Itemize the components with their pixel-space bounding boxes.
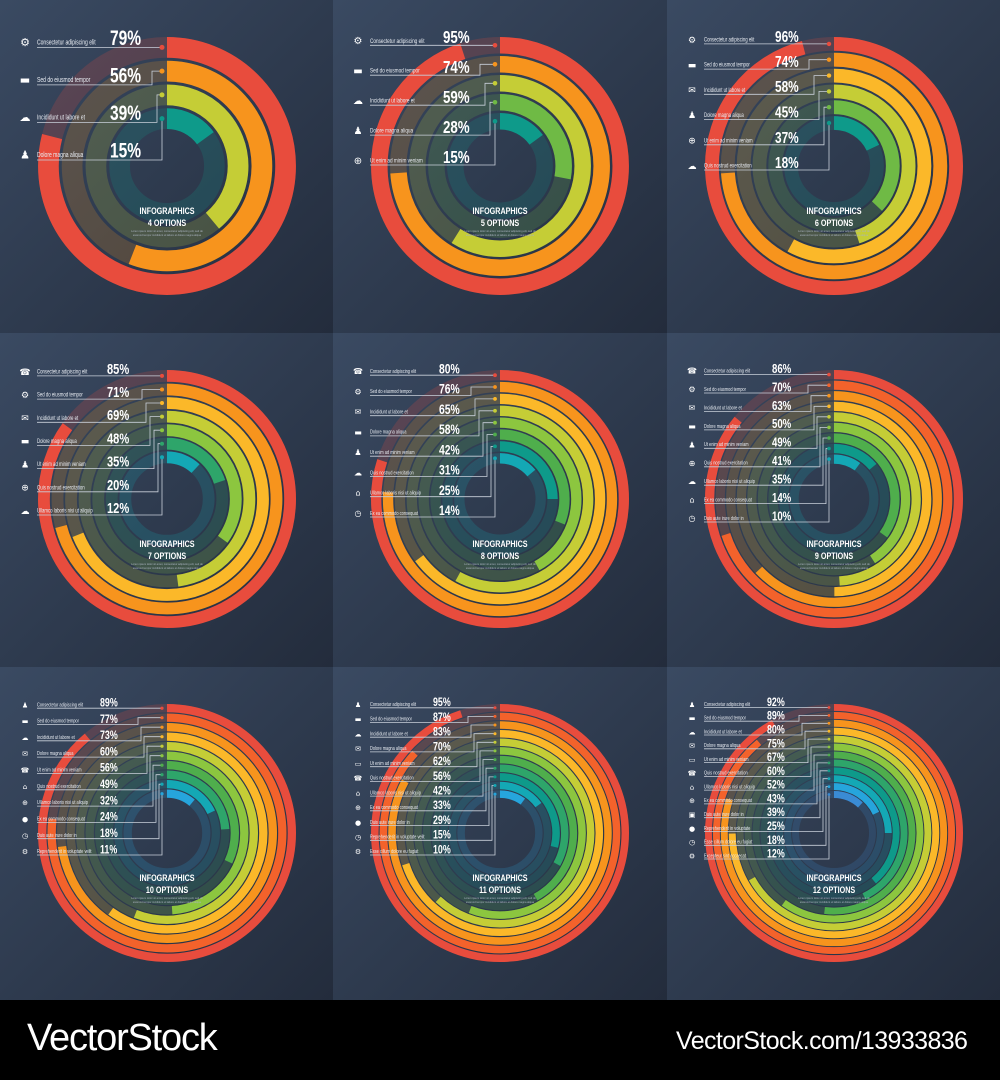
legend rows: [687, 363, 831, 524]
legend rows: 41%: [772, 455, 791, 468]
center title: INFOGRAPHICS: [807, 873, 862, 883]
center title: [798, 206, 870, 237]
legend rows: 89%: [100, 696, 118, 710]
legend rows: [688, 27, 831, 172]
legend rows: 73%: [100, 729, 118, 743]
legend rows: Reprehenderit in voluptate velit: [37, 849, 92, 855]
legend rows: ▬: [353, 66, 363, 77]
legend rows: ▬: [20, 74, 30, 86]
legend rows: 70%: [433, 740, 451, 754]
legend rows: ⊕: [689, 797, 695, 805]
legend rows: 76%: [439, 381, 460, 397]
legend rows: 60%: [767, 765, 785, 778]
legend rows: 15%: [443, 148, 470, 168]
legend rows: ⚙: [354, 388, 362, 396]
legend rows: Quis nostrud exercitation: [704, 770, 748, 777]
legend rows: ☁: [22, 734, 28, 742]
legend rows: 37%: [775, 128, 799, 146]
legend rows: Ullamco laboris nisi ut aliquip: [37, 800, 88, 806]
legend rows: Ut enim ad minim veniam: [704, 756, 749, 763]
legend rows: ☎: [353, 367, 363, 376]
legend rows: Ullamco laboris nisi ut aliquip: [704, 479, 755, 485]
legend rows: ♟: [21, 460, 29, 470]
legend rows: ◷: [689, 514, 696, 523]
legend rows: 85%: [107, 360, 129, 377]
legend rows: 83%: [433, 725, 451, 739]
legend rows: Quis nostrud exercitation: [704, 163, 752, 170]
legend rows: 31%: [439, 462, 460, 478]
chart: 4 rings: [48, 47, 286, 285]
legend rows: Incididunt ut labore et: [37, 114, 85, 122]
legend rows: 18%: [767, 834, 785, 847]
legend rows: Sed do eiusmod tempor: [370, 389, 412, 395]
center title: eiusmod tempor incididunt ut labore et dolore magna aliqua: [466, 233, 535, 237]
legend rows: Incididunt ut labore et: [370, 409, 408, 416]
legend rows: Sed do eiusmod tempor: [370, 716, 412, 723]
legend rows: ⌂: [23, 783, 27, 791]
legend rows: Duis aute irure dolor in: [704, 515, 744, 522]
center title: INFOGRAPHICS: [473, 206, 528, 216]
legend rows: Dolore magna aliqua: [704, 743, 741, 749]
legend rows: [21, 696, 164, 857]
legend rows: [20, 26, 164, 162]
chart: 8 rings: [376, 375, 624, 623]
center title: Lorem ipsum dolor sit amet, consectetur adipiscing elit, sed do: [464, 562, 536, 566]
legend rows: ♟: [355, 701, 361, 709]
legend rows: 35%: [772, 473, 791, 487]
center title: [464, 539, 536, 570]
legend rows: 48%: [107, 430, 129, 447]
chart: 5 rings: [379, 45, 621, 287]
footer logo text: VectorStock: [27, 1017, 217, 1059]
legend rows: ☎: [19, 368, 31, 378]
legend rows: Consectetur adipiscing elit: [37, 369, 88, 376]
legend rows: 45%: [775, 103, 799, 121]
legend rows: [353, 28, 497, 168]
legend rows: ⊕: [354, 156, 362, 167]
legend rows: 60%: [100, 745, 118, 759]
center title: eiusmod tempor incididunt ut labore et dolore magna aliqua: [133, 566, 202, 570]
center title: 8 OPTIONS: [481, 551, 520, 561]
panel: 4 options: [0, 0, 333, 333]
legend rows: Dolore magna aliqua: [370, 429, 407, 436]
legend rows: Quis nostrud exercitation: [37, 485, 85, 492]
legend rows: 25%: [767, 820, 785, 833]
legend rows: ▬: [355, 716, 361, 724]
legend rows: ◷: [22, 832, 29, 840]
legend rows: 86%: [772, 363, 791, 376]
legend rows: 12%: [107, 499, 129, 516]
legend rows: Ut enim ad minim veniam: [370, 449, 415, 456]
legend rows: 39%: [767, 806, 785, 820]
legend rows: Sed do eiusmod tempor: [370, 68, 420, 75]
legend rows: Incididunt ut labore et: [37, 734, 75, 741]
legend rows: Ex ea commodo consequat: [704, 497, 752, 504]
legend rows: Ut enim ad minim veniam: [37, 767, 82, 774]
legend rows: ⚙: [21, 391, 29, 401]
legend rows: ✉: [355, 745, 361, 753]
legend rows: ☁: [688, 728, 696, 736]
legend rows: 18%: [100, 827, 118, 840]
legend rows: Ex ea commodo consequat: [370, 804, 418, 811]
legend rows: 12%: [767, 847, 785, 861]
legend rows: Incididunt ut labore et: [370, 98, 415, 105]
legend rows: ⊕: [688, 136, 696, 146]
legend rows: Consectetur adipiscing elit: [37, 39, 96, 47]
legend rows: 43%: [767, 792, 785, 806]
legend rows: 52%: [767, 778, 785, 792]
chart: 9 rings: [710, 375, 958, 623]
legend rows: ⌂: [689, 496, 695, 505]
panel: 11 options: [333, 667, 667, 1000]
legend rows: ☁: [354, 730, 362, 738]
legend rows: Esse cillum dolore eu fugiat: [704, 839, 753, 846]
center title: INFOGRAPHICS: [807, 539, 862, 549]
legend rows: ●: [689, 825, 695, 833]
legend rows: Dolore magna aliqua: [370, 128, 414, 135]
legend rows: [354, 696, 496, 857]
center title: 5 OPTIONS: [481, 218, 520, 228]
legend rows: Ullamco laboris nisi ut aliquip: [370, 790, 421, 797]
legend rows: Consectetur adipiscing elit: [370, 701, 417, 708]
legend rows: ▬: [688, 61, 696, 71]
legend rows: ☎: [354, 775, 363, 783]
legend rows: ⚙: [354, 36, 362, 47]
legend rows: 63%: [772, 400, 791, 413]
center title: Lorem ipsum dolor sit amet, consectetur adipiscing elit, sed do: [131, 229, 203, 233]
legend rows: ☎: [21, 766, 30, 774]
legend rows: ●: [22, 816, 28, 824]
legend rows: ☎: [688, 770, 697, 778]
legend rows: ✉: [22, 750, 28, 758]
legend rows: ▬: [354, 428, 362, 437]
legend rows: Ullamco laboris nisi ut aliquip: [370, 490, 421, 497]
legend rows: ⚙: [22, 848, 28, 856]
legend rows: Duis aute irure dolor in: [370, 819, 410, 826]
legend rows: Quis nostrud exercitation: [370, 470, 414, 477]
legend rows: Duis aute irure dolor in: [37, 832, 77, 839]
center title: [131, 539, 203, 570]
chart: 6 rings: [712, 44, 956, 288]
legend rows: 25%: [439, 482, 460, 498]
legend rows: ⊕: [689, 459, 695, 468]
legend rows: ☁: [20, 507, 30, 517]
legend rows: Consectetur adipiscing elit: [704, 701, 751, 708]
legend rows: 15%: [110, 138, 141, 162]
legend rows: 39%: [110, 101, 141, 125]
center title: Lorem ipsum dolor sit amet, consectetur adipiscing elit, sed do: [798, 562, 870, 566]
legend rows: 35%: [107, 453, 129, 470]
legend rows: ▬: [21, 437, 29, 447]
legend rows: ♟: [688, 440, 696, 449]
legend rows: 92%: [767, 696, 785, 709]
legend rows: Consectetur adipiscing elit: [37, 702, 84, 709]
legend rows: Ullamco laboris nisi ut aliquip: [704, 784, 755, 791]
chart: 7 rings: [44, 376, 290, 622]
center title: Lorem ipsum dolor sit amet, consectetur adipiscing elit, sed do: [464, 896, 536, 900]
legend rows: Sed do eiusmod tempor: [704, 386, 746, 393]
legend rows: Dolore magna aliqua: [704, 113, 744, 119]
legend rows: 18%: [775, 153, 799, 171]
legend rows: 14%: [439, 502, 460, 518]
legend rows: 14%: [772, 492, 791, 505]
legend rows: 15%: [433, 828, 451, 842]
legend rows: 42%: [439, 442, 460, 458]
panel: 7 options: [0, 333, 333, 667]
legend rows: 59%: [443, 88, 470, 108]
legend rows: ▬: [689, 714, 695, 722]
legend rows: ⚙: [688, 385, 696, 394]
legend rows: 29%: [433, 814, 451, 827]
chart: 12 rings: [708, 707, 960, 959]
legend rows: 24%: [100, 810, 118, 824]
legend rows: Sed do eiusmod tempor: [704, 62, 750, 69]
legend rows: 71%: [107, 383, 129, 400]
legend rows: Incididunt ut labore et: [704, 405, 742, 412]
center title: Lorem ipsum dolor sit amet, consectetur adipiscing elit, sed do: [798, 229, 870, 233]
center title: INFOGRAPHICS: [140, 539, 195, 549]
legend rows: 69%: [107, 406, 129, 423]
legend rows: Incididunt ut labore et: [37, 415, 79, 422]
legend rows: ♟: [354, 126, 362, 137]
legend rows: ✉: [689, 404, 695, 412]
legend rows: [688, 696, 830, 861]
legend rows: 70%: [772, 381, 791, 395]
center title: eiusmod tempor incididunt ut labore et dolore magna aliqua: [466, 566, 535, 570]
legend rows: ⚙: [689, 852, 695, 860]
legend rows: 80%: [767, 723, 785, 737]
center title: Lorem ipsum dolor sit amet, consectetur adipiscing elit, sed do: [131, 896, 203, 900]
legend rows: 67%: [767, 751, 785, 765]
legend rows: 89%: [767, 709, 785, 723]
legend rows: 74%: [443, 58, 470, 78]
legend rows: ⊕: [355, 804, 361, 812]
legend rows: Incididunt ut labore et: [704, 87, 746, 94]
legend rows: Incididunt ut labore et: [370, 731, 408, 738]
center title: [464, 873, 536, 904]
center title: eiusmod tempor incididunt ut labore et dolore magna aliqua: [466, 900, 535, 904]
legend rows: Ut enim ad minim veniam: [370, 760, 415, 767]
center title: 11 OPTIONS: [479, 885, 522, 895]
legend rows: ♟: [22, 701, 28, 709]
legend rows: 50%: [772, 418, 791, 432]
legend rows: Sed do eiusmod tempor: [37, 392, 83, 399]
legend rows: Dolore magna aliqua: [37, 438, 77, 445]
legend rows: Ut enim ad minim veniam: [704, 138, 753, 145]
center title: Lorem ipsum dolor sit amet, consectetur adipiscing elit, sed do: [798, 896, 870, 900]
legend rows: ⌂: [355, 488, 361, 498]
legend rows: 95%: [443, 28, 470, 48]
legend rows: ●: [355, 819, 361, 827]
panel: 9 options: [667, 333, 1000, 667]
legend rows: 80%: [439, 361, 460, 377]
legend rows: ☎: [687, 366, 697, 376]
legend rows: 10%: [433, 843, 451, 857]
legend rows: ⚙: [355, 848, 361, 856]
legend rows: 56%: [110, 63, 141, 87]
legend rows: 49%: [100, 778, 118, 792]
legend rows: Dolore magna aliqua: [370, 746, 407, 752]
legend rows: 33%: [433, 799, 451, 813]
legend rows: 10%: [772, 510, 791, 524]
legend rows: Ex ea commodo consequat: [370, 510, 418, 517]
legend rows: ⚙: [688, 36, 696, 46]
legend rows: Quis nostrud exercitation: [370, 775, 414, 782]
legend rows: Sed do eiusmod tempor: [37, 76, 90, 84]
legend rows: Consectetur adipiscing elit: [370, 368, 417, 375]
legend rows: Dolore magna aliqua: [37, 751, 74, 757]
legend rows: ☁: [20, 111, 30, 124]
legend rows: Reprehenderit in voluptate: [704, 825, 751, 832]
legend rows: 32%: [100, 794, 118, 808]
legend rows: ◷: [355, 834, 362, 842]
legend rows: 58%: [775, 77, 799, 95]
center title: eiusmod tempor incididunt ut labore et dolore magna aliqua: [133, 233, 202, 237]
legend rows: ☁: [688, 477, 696, 486]
legend rows: ☁: [353, 96, 363, 107]
chart: 11 rings: [375, 708, 625, 958]
legend rows: 56%: [433, 770, 451, 783]
center title: 4 OPTIONS: [148, 218, 187, 228]
legend rows: Duis aute irure dolor in: [704, 811, 744, 818]
center title: INFOGRAPHICS: [473, 539, 528, 549]
legend rows: ⊕: [22, 799, 28, 807]
center title: [798, 873, 870, 904]
legend rows: Incididunt ut labore et: [704, 729, 742, 736]
legend rows: ⚙: [20, 36, 30, 49]
legend rows: Dolore magna aliqua: [704, 423, 741, 430]
legend rows: Consectetur adipiscing elit: [370, 38, 425, 45]
legend rows: 49%: [772, 436, 791, 450]
legend rows: Consectetur adipiscing elit: [704, 37, 755, 44]
legend rows: Ut enim ad minim veniam: [370, 158, 423, 165]
center title: 10 OPTIONS: [146, 885, 189, 895]
center title: INFOGRAPHICS: [807, 206, 862, 216]
legend rows: ◷: [355, 509, 362, 518]
center title: INFOGRAPHICS: [140, 206, 195, 216]
legend rows: 58%: [439, 421, 460, 437]
legend rows: 77%: [100, 713, 118, 726]
footer watermark bar: [0, 1000, 1000, 1080]
center title: INFOGRAPHICS: [473, 873, 528, 883]
legend rows: ◷: [689, 839, 696, 847]
center title: 9 OPTIONS: [815, 551, 854, 561]
legend rows: ⌂: [690, 783, 694, 791]
legend rows: Quis nostrud exercitation: [37, 783, 81, 790]
legend rows: ⊕: [21, 484, 29, 494]
legend rows: ☁: [688, 162, 696, 172]
center title: 7 OPTIONS: [148, 551, 187, 561]
footer url text: VectorStock.com/13933836: [676, 1027, 967, 1055]
legend rows: 74%: [775, 52, 799, 70]
legend rows: 87%: [433, 711, 451, 724]
center title: [131, 873, 203, 904]
panel: 10 options: [0, 667, 333, 1000]
chart: 10 rings: [42, 708, 292, 958]
center title: 6 OPTIONS: [815, 218, 854, 228]
legend rows: Consectetur adipiscing elit: [704, 368, 751, 375]
legend rows: ⌂: [356, 789, 360, 797]
legend rows: [19, 360, 164, 517]
legend rows: Excepteur sint occaecat: [704, 853, 747, 860]
legend rows: Ut enim ad minim veniam: [704, 442, 749, 448]
center title: eiusmod tempor incididunt ut labore et dolore magna aliqua: [800, 900, 869, 904]
center title: [131, 206, 203, 237]
legend rows: Ex ea commodo consequat: [704, 798, 752, 804]
panel: 8 options: [333, 333, 667, 667]
legend rows: Sed do eiusmod tempor: [704, 715, 746, 722]
legend rows: ✉: [21, 414, 29, 424]
legend rows: 79%: [110, 26, 141, 50]
legend rows: ▭: [355, 760, 361, 768]
legend rows: 95%: [433, 696, 451, 710]
legend rows: ▬: [688, 422, 696, 431]
legend rows: ▭: [689, 756, 695, 764]
center title: 12 OPTIONS: [813, 885, 856, 895]
center title: INFOGRAPHICS: [140, 873, 195, 883]
panel: 12 options: [667, 667, 1000, 1000]
legend rows: Quis nostrud exercitation: [704, 460, 748, 467]
legend rows: ✉: [355, 408, 361, 416]
legend rows: ♟: [688, 111, 696, 121]
center title: Lorem ipsum dolor sit amet, consectetur adipiscing elit, sed do: [131, 562, 203, 566]
legend rows: ♟: [689, 701, 695, 709]
legend rows: 65%: [439, 401, 460, 417]
legend rows: 28%: [443, 118, 470, 138]
legend rows: [353, 361, 497, 518]
center title: [798, 539, 870, 570]
center title: [464, 206, 536, 237]
legend rows: ♟: [20, 148, 30, 162]
legend rows: Sed do eiusmod tempor: [37, 718, 79, 725]
legend rows: 96%: [775, 27, 799, 45]
legend rows: Ullamco laboris nisi ut aliquip: [37, 508, 93, 515]
center title: eiusmod tempor incididunt ut labore et dolore magna aliqua: [800, 233, 869, 237]
legend rows: 62%: [433, 755, 451, 769]
legend rows: Ut enim ad minim veniam: [37, 462, 86, 468]
panel: 5 options: [333, 0, 667, 333]
center title: eiusmod tempor incididunt ut labore et dolore magna aliqua: [800, 566, 869, 570]
legend rows: ▬: [22, 718, 28, 726]
center title: Lorem ipsum dolor sit amet, consectetur adipiscing elit, sed do: [464, 229, 536, 233]
legend rows: ✉: [689, 742, 695, 750]
legend rows: Esse cillum dolore eu fugiat: [370, 849, 419, 855]
center title: eiusmod tempor incididunt ut labore et dolore magna aliqua: [133, 900, 202, 904]
legend rows: 56%: [100, 761, 118, 775]
legend rows: 11%: [100, 843, 118, 857]
legend rows: Ex ea commodo consequat: [37, 816, 85, 823]
legend rows: Dolore magna aliqua: [37, 151, 84, 159]
legend rows: ▣: [689, 811, 695, 819]
legend rows: Reprehenderit in voluptate velit: [370, 834, 425, 841]
panel: 6 options: [667, 0, 1000, 333]
legend rows: ✉: [688, 86, 696, 96]
legend rows: 20%: [107, 476, 129, 493]
legend rows: 42%: [433, 784, 451, 798]
legend rows: ♟: [354, 448, 362, 457]
legend rows: 75%: [767, 737, 785, 751]
legend rows: ☁: [354, 468, 362, 478]
